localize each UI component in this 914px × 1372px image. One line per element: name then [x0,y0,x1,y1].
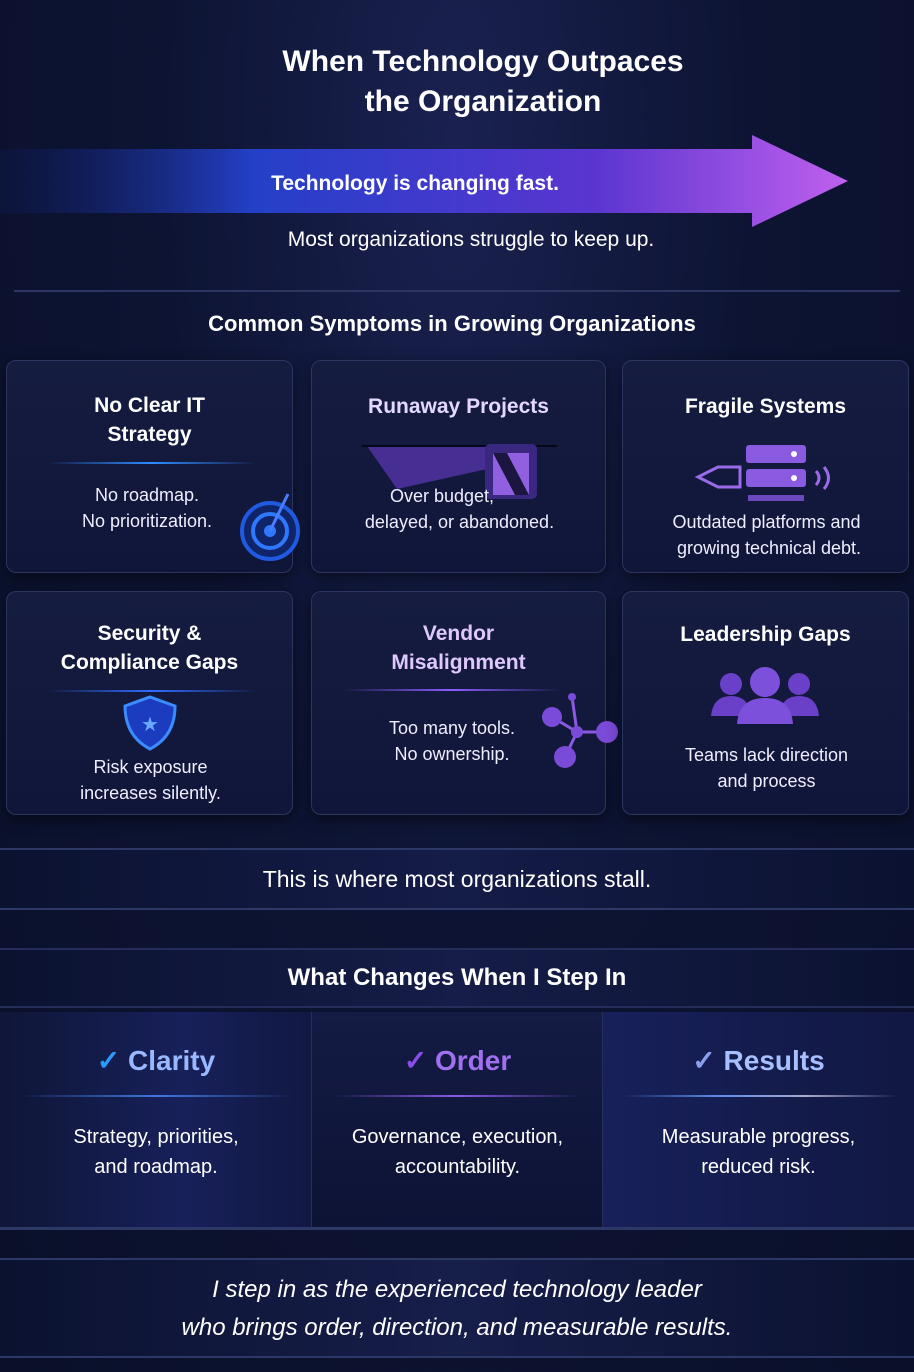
title: When Technology Outpaces [282,45,684,78]
column: Clarity: and roadmap. [94,1156,218,1178]
column: Results: ✓ Results [692,1045,825,1076]
panel: Security & Compliance Gaps: Security & [98,622,201,645]
icon: shield [124,695,176,751]
panel: Security & Compliance Gaps [6,591,293,815]
icon: runaway chart [362,444,557,499]
panel: Vendor Misalignment: Too many tools. [389,718,515,738]
panel: No Clear IT Strategy: Strategy [107,423,192,446]
closing statement: I step in as the experienced technology leader [212,1276,702,1303]
panel: Runaway Projects: Over budget, [390,486,494,506]
panel: Vendor Misalignment: No ownership. [394,744,510,764]
column: Clarity: ✓ Clarity [97,1045,215,1076]
column: Results [603,1012,914,1227]
panel: Vendor Misalignment: Vendor [423,622,494,645]
panel: Fragile Systems: Fragile Systems [685,395,846,418]
closing statement: who brings order, direction, and measurable results. [182,1314,732,1341]
closing statement [0,1258,914,1358]
column: Clarity [0,1012,312,1227]
icon: people [711,667,819,724]
column: Results: Measurable progress, [662,1126,855,1148]
arrow: technology changing fast: Technology is changing fast. [271,172,559,195]
column: Order: Governance, execution, [352,1126,563,1148]
section heading: what changes: What Changes When I Step In [288,964,626,991]
column: Order: ✓ Order [404,1045,511,1076]
panel: Fragile Systems: Outdated platforms and [672,512,861,532]
panel: Leadership Gaps: Teams lack direction [685,745,848,765]
icon: shield: ★ [141,714,159,736]
panel: No Clear IT Strategy: No roadmap. [95,485,199,505]
panel: Fragile Systems [622,360,909,573]
panel: Runaway Projects [311,360,606,573]
icon: target [240,493,300,561]
panel: Security & Compliance Gaps: increases silently. [80,783,221,803]
section heading: what changes [0,948,914,1008]
band: stall statement [0,848,914,910]
icon: server [694,445,830,501]
panel: Leadership Gaps: and process [717,771,816,791]
band: stall statement: This is where most organizations stall. [263,866,651,892]
panel: outcomes [0,1012,914,1230]
panel: No Clear IT Strategy: No Clear IT [94,394,205,417]
panel: Runaway Projects: delayed, or abandoned. [365,512,554,532]
panel: Leadership Gaps [622,591,909,815]
title [282,45,684,118]
panel: Vendor Misalignment [311,591,606,815]
panel: Leadership Gaps: Leadership Gaps [680,623,851,646]
panel: Security & Compliance Gaps: Risk exposure [93,757,208,777]
icon: network nodes [542,693,618,768]
title: the Organization [365,85,601,118]
column: Clarity: Strategy, priorities, [73,1126,239,1148]
subtitle: Most organizations struggle to keep up. [288,228,654,251]
column: Results: reduced risk. [701,1156,816,1178]
panel: Security & Compliance Gaps: Compliance Gaps [61,651,238,674]
column: Order: accountability. [395,1156,520,1178]
panel: Vendor Misalignment: Misalignment [391,651,526,674]
column: Order [312,1012,603,1227]
panel: Runaway Projects: Runaway Projects [368,395,549,418]
panel: No Clear IT Strategy [6,360,293,573]
arrow: technology changing fast [0,135,848,227]
panel: Fragile Systems: growing technical debt. [677,538,861,558]
section heading: symptoms: Common Symptoms in Growing Organizations [208,311,696,336]
panel: No Clear IT Strategy: No prioritization. [82,511,212,531]
